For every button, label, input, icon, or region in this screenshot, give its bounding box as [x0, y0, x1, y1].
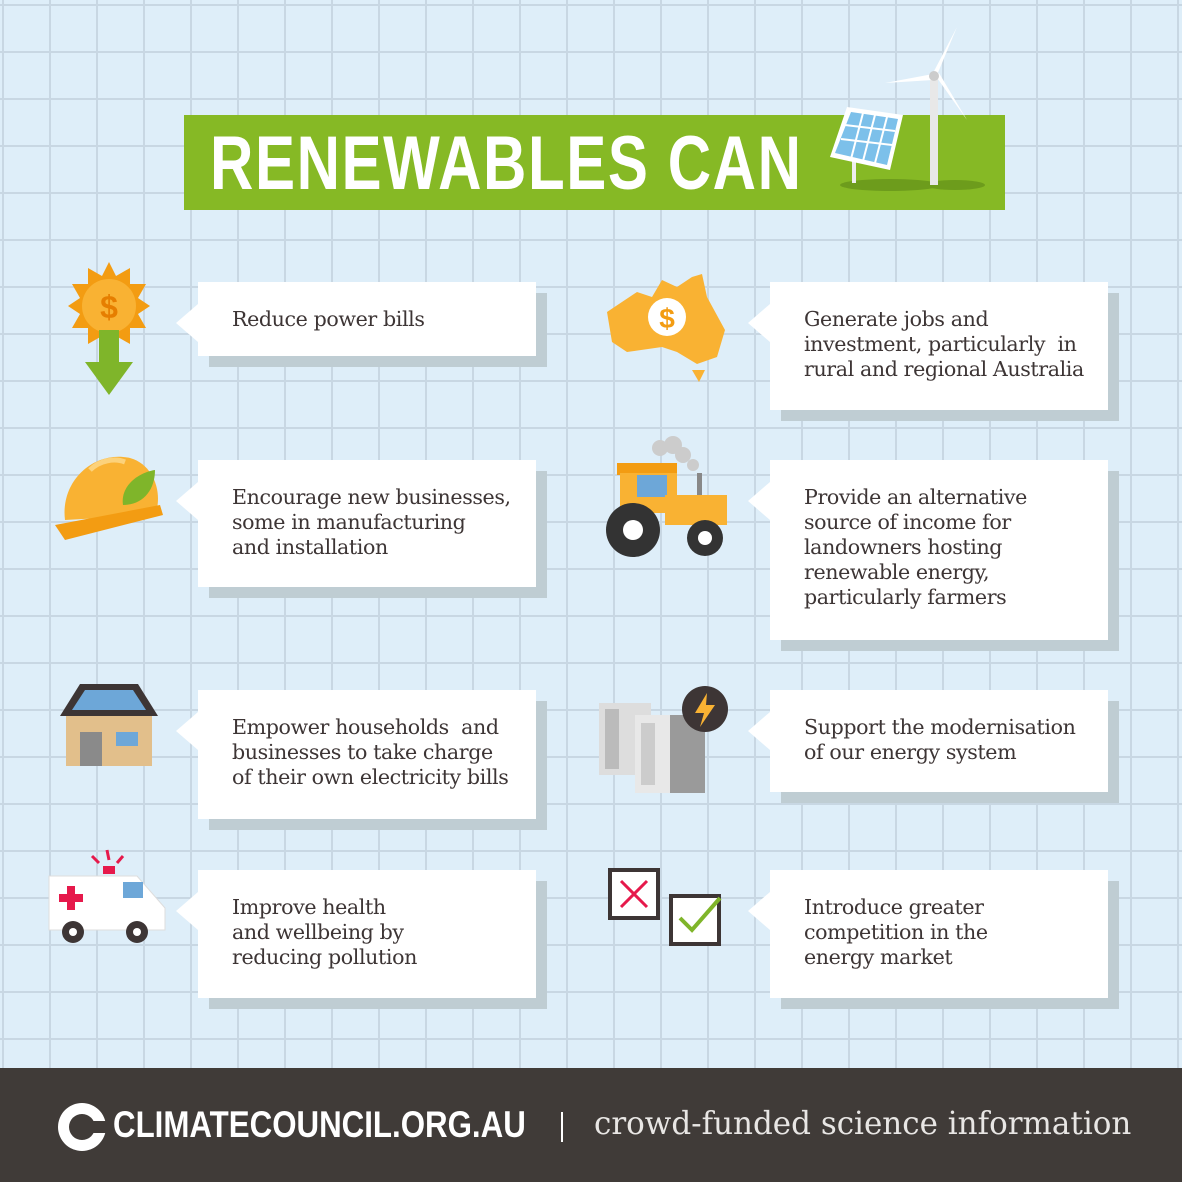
icon: hard hat with leaf — [55, 456, 163, 540]
card: alternative income: landowners hosting — [804, 535, 1002, 559]
icon: ambulance — [48, 850, 166, 943]
card: alternative income: renewable energy, — [804, 560, 989, 584]
title text: RENEWABLES CAN — [210, 121, 803, 206]
separator — [561, 1112, 563, 1142]
icon: australia map with dollar: $ — [659, 303, 675, 334]
card: generate jobs: investment, particularly in — [804, 332, 1076, 356]
card: generate jobs — [748, 282, 1119, 421]
card: improve health: and wellbeing by — [232, 920, 404, 944]
card: improve health: Improve health — [232, 895, 386, 919]
logo icon — [58, 1103, 106, 1151]
card: improve health — [176, 870, 547, 1009]
icon: checkboxes — [608, 868, 722, 946]
card: empower households — [176, 690, 547, 830]
icon: tractor — [606, 436, 727, 557]
card: modernisation: Support the modernisation — [804, 715, 1075, 739]
card: greater competition: competition in the — [804, 920, 988, 944]
icon: solar panel and wind turbine — [830, 28, 985, 191]
card: alternative income — [748, 460, 1119, 651]
card: encourage new businesses: and installation — [232, 535, 388, 559]
card: greater competition — [748, 870, 1119, 1009]
card: improve health: reducing pollution — [232, 945, 417, 969]
card: empower households: Empower households and — [232, 715, 499, 739]
card: modernisation — [748, 690, 1119, 803]
card: modernisation: of our energy system — [804, 740, 1016, 764]
tagline: crowd-funded science information — [594, 1104, 1131, 1142]
icon: batteries with lightning — [599, 686, 728, 793]
card: encourage new businesses: Encourage new businesses, — [232, 485, 511, 509]
card: encourage new businesses — [176, 460, 547, 598]
card: empower households: businesses to take charge — [232, 740, 493, 764]
icon: house with solar roof — [60, 684, 158, 766]
icon: sun with dollar and down arrow — [68, 262, 150, 395]
card: greater competition: energy market — [804, 945, 952, 969]
card: encourage new businesses: some in manufacturing — [232, 510, 465, 534]
card: generate jobs: rural and regional Australia — [804, 357, 1084, 381]
icon: australia map with dollar — [607, 274, 725, 382]
card: empower households: of their own electricity bills — [232, 765, 508, 789]
card: reduce power bills: Reduce power bills — [232, 307, 425, 331]
card: greater competition: Introduce greater — [804, 895, 984, 919]
card: reduce power bills — [176, 282, 547, 367]
card: alternative income: particularly farmers — [804, 585, 1006, 609]
card: generate jobs: Generate jobs and — [804, 307, 988, 331]
title banner — [184, 115, 1005, 210]
icon: sun with dollar and down arrow: $ — [100, 289, 118, 325]
logo text: CLIMATECOUNCIL.ORG.AU — [113, 1104, 526, 1145]
footer — [0, 1068, 1182, 1182]
card: alternative income: source of income for — [804, 510, 1011, 534]
card: alternative income: Provide an alternative — [804, 485, 1027, 509]
